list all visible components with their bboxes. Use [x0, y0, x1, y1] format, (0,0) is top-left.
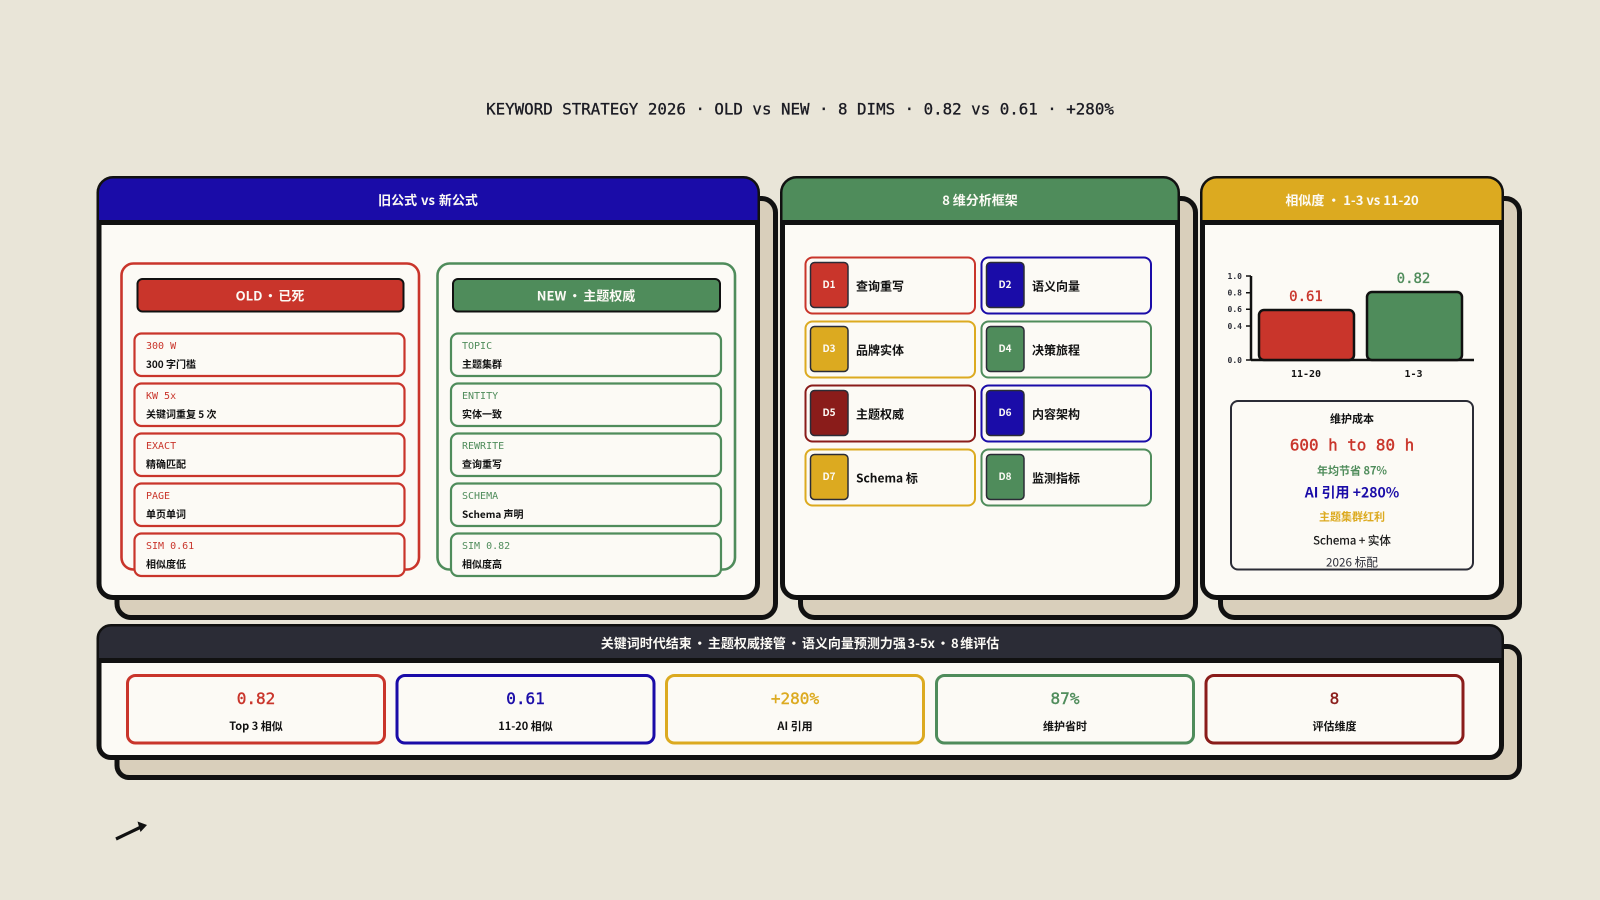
- item: KW 5x: [134, 384, 404, 426]
- card: D8: [982, 450, 1151, 506]
- item: SIM 0.82: 相似度高: [462, 556, 502, 571]
- stat: maintenance time saved: 维护省时: [1043, 718, 1087, 734]
- card: D4: 决策旅程: [1032, 341, 1080, 358]
- card: D3: 品牌实体: [856, 341, 904, 358]
- bar chart: 0.8: [1228, 288, 1242, 298]
- item: PAGE: 单页单词: [146, 506, 186, 521]
- panel: summary strip: [96, 626, 1520, 778]
- card: D4: [982, 322, 1151, 378]
- item: EXACT: 精确匹配: [146, 456, 186, 471]
- bar chart: 0.6: [1228, 305, 1242, 314]
- item: 300 W: 300 字门槛: [146, 356, 196, 371]
- stat: AI citation: AI 引用: [776, 718, 813, 734]
- stat: AI citation: [666, 676, 924, 743]
- item: 300 W: 300 W: [146, 341, 177, 352]
- panel: similarity: [1200, 178, 1520, 618]
- item: TOPIC: [451, 334, 721, 376]
- item: EXACT: [134, 434, 404, 476]
- callout: maintenance cost: 600 h to 80 h: [1290, 435, 1414, 454]
- stat: Top 3 similarity: Top 3 相似: [229, 718, 283, 734]
- item: REWRITE: 查询重写: [462, 456, 502, 471]
- item: SCHEMA: Schema 声明: [462, 506, 524, 521]
- card: D1: 查询重写: [856, 277, 904, 294]
- column: new formula: [438, 264, 735, 576]
- column: old formula: [122, 264, 419, 576]
- callout: maintenance cost: 2026 标配: [1326, 554, 1378, 570]
- card: D8: D8: [998, 468, 1012, 483]
- item: 300 W: [134, 334, 404, 376]
- title: KEYWORD STRATEGY 2026 · OLD vs NEW · 8 DIMS · 0.82 vs 0.61 · +280%: [486, 100, 1114, 119]
- item: SCHEMA: [451, 484, 721, 526]
- heading: similarity: 相似度 · 1-3 vs 11-20: [1285, 190, 1419, 209]
- callout: maintenance cost: 主题集群红利: [1319, 508, 1385, 524]
- icon: arrow: [116, 822, 147, 839]
- panel: 8 dimension framework: [780, 178, 1196, 618]
- bar chart: 1-3: [1404, 369, 1423, 380]
- stat: 11-20 similarity: 0.61: [506, 689, 545, 708]
- heading: 8 dimensions: 8 维分析框架: [942, 190, 1018, 209]
- card: D2: D2: [998, 276, 1012, 291]
- card: D7: Schema 标: [856, 469, 918, 486]
- callout: maintenance cost: Schema + 实体: [1313, 532, 1391, 548]
- stat: 11-20 similarity: [397, 676, 654, 743]
- card: D2: 语义向量: [1032, 277, 1080, 294]
- item: SIM 0.61: SIM 0.61: [146, 541, 194, 552]
- item: ENTITY: 实体一致: [462, 406, 502, 421]
- card: D1: D1: [822, 276, 836, 291]
- card: D5: 主题权威: [856, 405, 904, 422]
- item: SIM 0.82: SIM 0.82: [462, 541, 510, 552]
- bar chart: [1228, 271, 1474, 380]
- item: PAGE: PAGE: [146, 491, 170, 502]
- heading: old vs new: 旧公式 vs 新公式: [378, 190, 478, 209]
- item: KW 5x: KW 5x: [146, 391, 176, 402]
- item: SIM 0.61: [134, 534, 404, 576]
- stat: maintenance time saved: 87%: [1051, 689, 1080, 708]
- item: EXACT: EXACT: [146, 441, 176, 452]
- card: D2: [982, 258, 1151, 314]
- bar chart: 0.0: [1228, 356, 1242, 365]
- item: PAGE: [134, 484, 404, 526]
- card: D1: [806, 258, 975, 314]
- card: D5: D5: [822, 404, 836, 419]
- item: REWRITE: [451, 434, 721, 476]
- card: D5: [806, 386, 975, 442]
- stat: evaluation dimensions: [1206, 676, 1463, 743]
- stat: Top 3 similarity: 0.82: [237, 689, 275, 708]
- stat: AI citation: +280%: [771, 689, 819, 708]
- stat: Top 3 similarity: [128, 676, 384, 743]
- card: D3: D3: [822, 340, 836, 355]
- card: D4: D4: [998, 340, 1012, 355]
- card: D7: [806, 450, 975, 506]
- stat: evaluation dimensions: 8: [1330, 689, 1339, 708]
- item: ENTITY: ENTITY: [462, 391, 498, 402]
- bar chart: 0.82: [1397, 271, 1430, 287]
- stat: maintenance time saved: [936, 676, 1194, 743]
- callout: maintenance cost: 维护成本: [1330, 410, 1374, 426]
- item: SCHEMA: SCHEMA: [462, 491, 498, 502]
- column: old formula: OLD · 已死: [236, 286, 304, 304]
- item: SIM 0.82: [451, 534, 721, 576]
- bar chart: 1.0: [1228, 272, 1242, 281]
- card: D3: [806, 322, 975, 378]
- item: TOPIC: TOPIC: [462, 341, 492, 352]
- callout: maintenance cost: AI 引用 +280%: [1304, 482, 1400, 502]
- callout: maintenance cost: [1231, 401, 1473, 570]
- bar chart: 0.4: [1228, 322, 1242, 331]
- card: D7: D7: [822, 468, 836, 483]
- card: D8: 监测指标: [1032, 469, 1080, 486]
- item: KW 5x: 关键词重复 5 次: [146, 406, 216, 421]
- item: TOPIC: 主题集群: [462, 356, 502, 371]
- column: new formula: NEW · 主题权威: [537, 286, 635, 304]
- stat: evaluation dimensions: 评估维度: [1312, 718, 1356, 734]
- bar chart: 0.61: [1289, 289, 1323, 305]
- panel: old vs new formula: [96, 178, 776, 618]
- card: D6: 内容架构: [1032, 405, 1080, 422]
- card: D6: [982, 386, 1151, 442]
- card: D6: D6: [998, 404, 1012, 419]
- bar chart: 11-20: [1291, 369, 1321, 380]
- heading: summary: 关键词时代结束 · 主题权威接管 · 语义向量预测力强 3-5x · 8 维评估: [601, 633, 999, 652]
- item: ENTITY: [451, 384, 721, 426]
- item: SIM 0.61: 相似度低: [146, 556, 186, 571]
- callout: maintenance cost: 年均节省 87%: [1317, 462, 1387, 478]
- item: REWRITE: REWRITE: [462, 441, 504, 452]
- stat: 11-20 similarity: 11-20 相似: [498, 718, 553, 734]
